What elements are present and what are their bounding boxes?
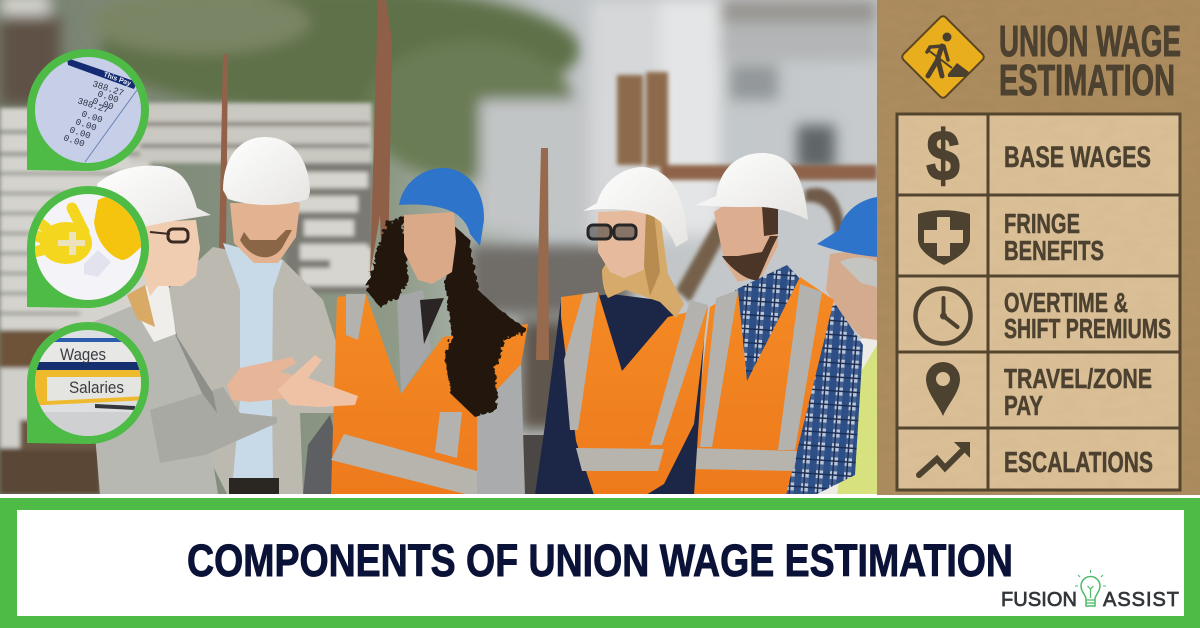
pay slip photo: 388.27 <box>76 96 110 116</box>
inset badge: yellow glove and hard hat <box>27 186 150 308</box>
title: COMPONENTS OF UNION WAGE ESTIMATION <box>187 535 1013 586</box>
pay slip photo: 0.00 <box>74 117 98 134</box>
logo: fusion assist: ASSIST <box>1103 589 1179 611</box>
photo background: trees, building and stacked concrete <box>0 0 877 495</box>
row: travel and zone pay: TRAVEL/ZONE <box>1004 363 1152 394</box>
green teardrop frame <box>27 186 149 308</box>
pay slip photo <box>35 57 141 163</box>
pay slip photo: 0.00 <box>62 133 86 150</box>
table of wage components <box>897 114 1180 491</box>
pay slip photo: 0.00 <box>80 109 104 126</box>
binder photo: Salaries <box>69 378 124 397</box>
person 6: older man with blue hard hat and hi-vis vest <box>811 197 877 495</box>
icon: construction worker warning sign <box>901 15 985 99</box>
row: travel and zone pay <box>926 362 1152 421</box>
heading: union wage estimation <box>999 17 1181 105</box>
row: fringe benefits: FRINGE <box>1004 208 1080 239</box>
logo: fusion assist <box>1001 570 1179 611</box>
hands gesturing <box>227 357 320 402</box>
row: fringe benefits <box>918 208 1104 266</box>
pay slip photo: This Pay <box>102 71 132 88</box>
green teardrop frame <box>27 49 149 171</box>
row: travel and zone pay: PAY <box>1004 390 1043 421</box>
logo: fusion assist: FUSION <box>1001 589 1077 611</box>
row: fringe benefits: BENEFITS <box>1004 235 1104 266</box>
row: base wages <box>926 115 1151 195</box>
binder photo: Wages <box>60 345 106 364</box>
inset badge: wages and salaries binders <box>27 322 150 444</box>
row: overtime and shift premiums <box>916 287 1171 344</box>
icon: light bulb <box>1075 570 1106 606</box>
green teardrop frame <box>27 322 149 444</box>
person 2: man in beige blazer and white hard hat <box>167 137 347 494</box>
row: base wages: $ <box>926 115 960 195</box>
row: escalations <box>919 442 1153 479</box>
glove photo <box>35 194 141 300</box>
person 1: woman in grey blazer and white hard hat <box>86 166 358 495</box>
pay slip photo: 388.27 <box>91 79 125 99</box>
person 5: bearded man in plaid shirt and orange vest <box>690 153 863 495</box>
row: overtime and shift premiums: OVERTIME & <box>1004 287 1128 318</box>
person 3: woman with blue hard hat and orange vest <box>303 168 528 497</box>
kraft paper background <box>877 0 1200 495</box>
pay slip photo: 0.00 <box>68 125 92 142</box>
pay slip photo: 0.00 <box>91 96 115 113</box>
inset badge: pay slip <box>27 49 150 171</box>
person 4: woman with white hard hat and orange vest <box>535 167 708 495</box>
pay slip photo: 0.00 <box>96 89 120 106</box>
footer banner <box>0 498 1200 628</box>
panel: union wage estimation board <box>877 0 1200 495</box>
photo: construction workers on site <box>0 0 877 497</box>
binder photo <box>35 330 141 436</box>
